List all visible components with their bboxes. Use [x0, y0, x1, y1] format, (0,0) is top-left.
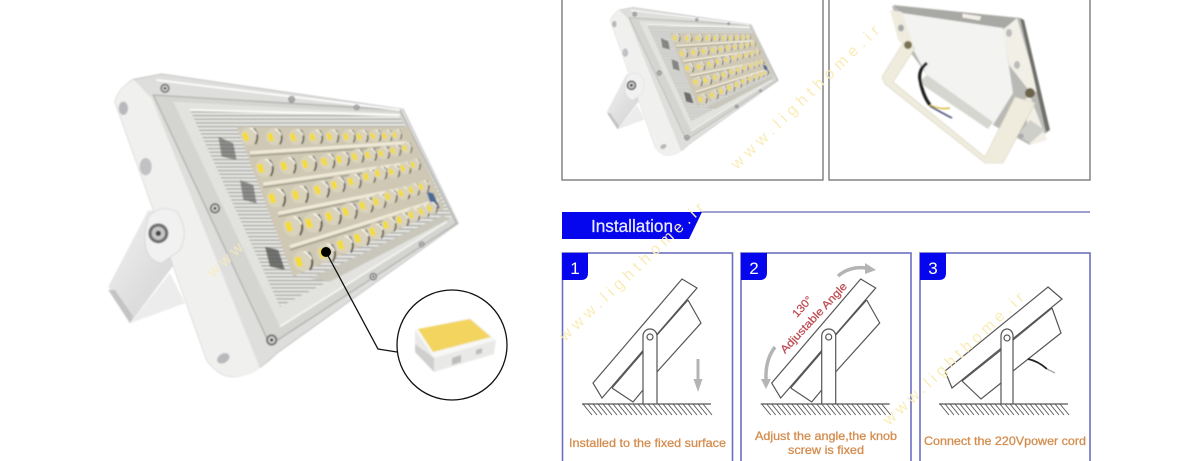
angle label: Adjustable Angle	[778, 281, 850, 356]
step 1 badge	[562, 253, 588, 280]
diagram: mounted on fixed surface	[582, 279, 712, 415]
watermark: middle: www.lighthome.ir	[555, 199, 708, 346]
panel: step 1	[562, 253, 732, 461]
step 2 badge	[741, 253, 767, 280]
step 3 badge: 3	[928, 259, 938, 278]
panel frame	[562, 0, 823, 180]
section heading: Installation	[562, 212, 1090, 239]
watermark: top: www.lighthome.ir	[727, 22, 883, 174]
watermark on main lamp: www.	[203, 234, 252, 282]
step 1 caption: Installed to the fixed surface	[569, 436, 726, 450]
step 2 badge: 2	[749, 259, 759, 278]
panel frame	[920, 253, 1090, 461]
heading tab	[562, 212, 702, 239]
panel frame	[562, 253, 732, 461]
diagram: power cord	[939, 287, 1069, 415]
diagram: adjusted angle	[761, 279, 891, 415]
watermark: lower right: www.lighthome.ir	[879, 289, 1028, 430]
callout pointer dot	[321, 247, 331, 257]
step 1 badge: 1	[570, 259, 580, 278]
heading text: Installation	[591, 216, 673, 236]
callout leader line	[326, 252, 397, 352]
panel: step 2	[741, 253, 911, 461]
step 3 badge	[920, 253, 946, 280]
floodlight back	[882, 5, 1050, 163]
panel frame	[741, 253, 911, 461]
step 2 caption: screw is fixed	[788, 443, 864, 457]
callout: LED chip magnified	[321, 247, 507, 400]
panel: back view photo	[829, 0, 1090, 180]
panel frame	[829, 0, 1090, 180]
heading rule	[700, 211, 1090, 213]
step 3 caption: Connect the 220Vpower cord	[924, 434, 1086, 448]
panel: step 3	[920, 253, 1090, 461]
panel: front view photo	[562, 0, 823, 180]
angle label: 130°	[790, 294, 815, 320]
arrow: rotate down	[766, 347, 775, 380]
icon: power cord	[1028, 359, 1055, 373]
step 2 caption	[755, 429, 897, 457]
main floodlight product image	[108, 74, 458, 377]
small floodlight front	[607, 7, 778, 156]
icon: SMD LED chip	[415, 318, 496, 372]
step 2 caption: Adjust the angle,the knob	[755, 429, 897, 443]
callout circle	[397, 290, 507, 400]
arrow: down	[694, 359, 702, 392]
arrow: rotate up	[838, 268, 866, 276]
